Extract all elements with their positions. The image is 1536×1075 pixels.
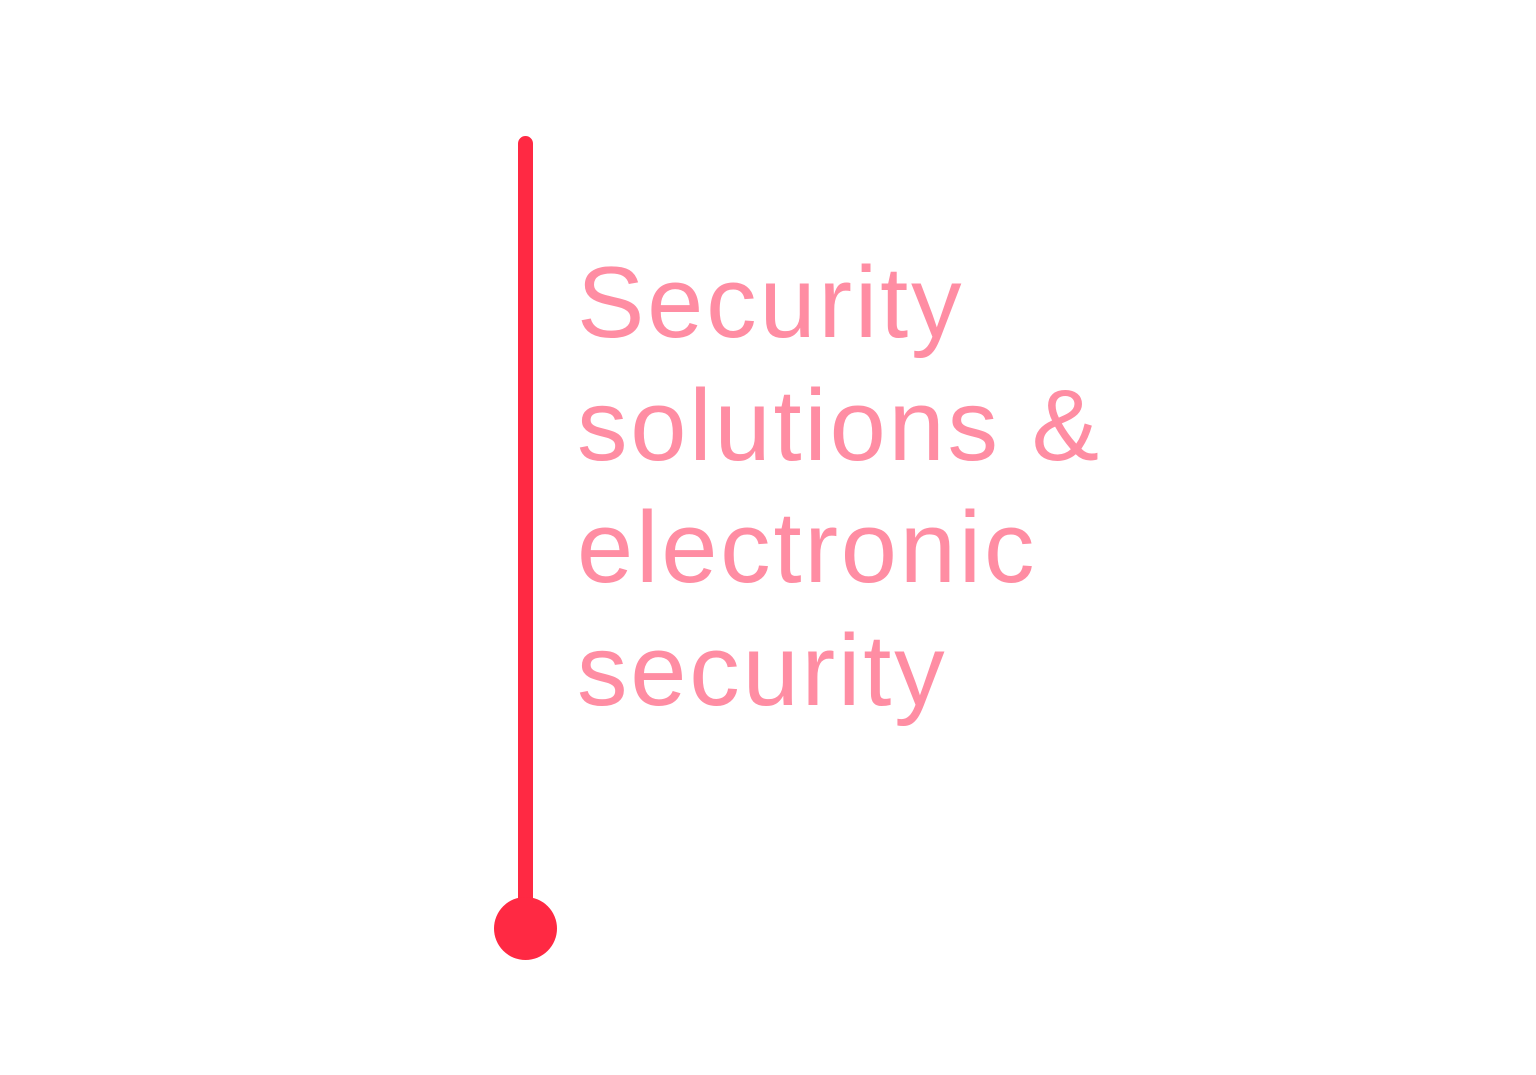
vertical line: [518, 136, 533, 926]
title: security: [577, 614, 947, 726]
title: [577, 247, 1102, 726]
icon: end dot: [494, 897, 557, 960]
title: electronic: [577, 492, 1037, 604]
title: solutions &: [577, 370, 1102, 482]
title: Security: [577, 247, 964, 359]
